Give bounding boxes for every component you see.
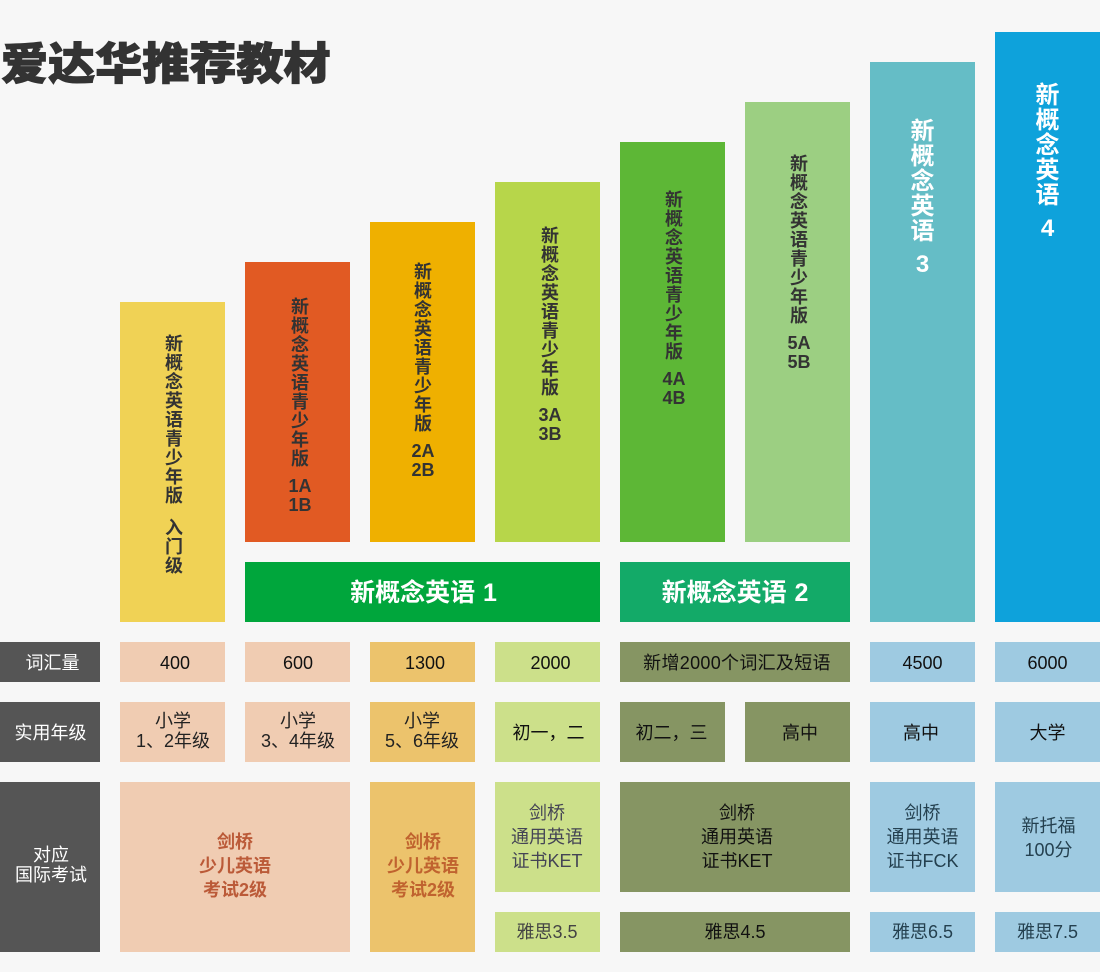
vocab 600: 600 xyxy=(283,653,313,673)
exam KET lime: 剑桥 xyxy=(529,803,565,823)
book bar: 入门级: 少 xyxy=(165,448,183,468)
book bar: 3A 3B: 3A xyxy=(538,405,562,425)
book bar: 2A 2B: 新 xyxy=(414,262,432,282)
exam KET olive xyxy=(620,782,850,892)
band: 新概念英语 2: 新概念英语 2 xyxy=(662,579,808,607)
book bar: 新概念英语 4: 念 xyxy=(1036,132,1060,159)
vocab 6000: 6000 xyxy=(1027,653,1068,673)
book bar: 4A 4B: 4A xyxy=(662,369,686,389)
exam 剑桥少儿英语: 少儿英语 xyxy=(387,856,459,876)
exam 剑桥少儿英语 wide: 剑桥 xyxy=(217,832,253,852)
book bar: 1A 1B: 概 xyxy=(291,316,309,336)
row label: 对应国际考试: 对应 xyxy=(33,845,69,865)
book bar: 入门级 xyxy=(120,302,225,622)
grade 高中: 高中 xyxy=(903,723,939,743)
book bar: 入门级: 英 xyxy=(165,391,183,411)
book bar: 4A 4B: 青 xyxy=(665,285,683,305)
exam KET olive: 证书KET xyxy=(701,851,772,871)
book bar: 新概念英语 4: 语 xyxy=(1036,182,1060,209)
book bar: 2A 2B: 语 xyxy=(414,338,432,358)
exam FCK xyxy=(870,782,975,892)
book bar: 新概念英语 3: 3 xyxy=(916,251,929,278)
book bar: 4A 4B: 语 xyxy=(665,266,683,286)
book bar: 4A 4B: 少 xyxy=(665,304,683,324)
exam KET lime: 证书KET xyxy=(511,851,582,871)
book bar: 入门级: 概 xyxy=(165,353,183,373)
grade 高中 xyxy=(870,702,975,762)
book bar: 4A 4B: 念 xyxy=(665,228,683,248)
grade 3、4: 小学 xyxy=(280,711,316,731)
book bar: 4A 4B: 英 xyxy=(665,247,683,267)
book bar: 入门级: 门 xyxy=(165,537,183,557)
band: 新概念英语 1 xyxy=(245,562,600,622)
book bar: 4A 4B: 版 xyxy=(665,342,683,362)
row label: 对应国际考试 xyxy=(0,782,100,952)
book bar: 新概念英语 3: 新 xyxy=(910,118,934,145)
exam IELTS 3.5: 雅思3.5 xyxy=(516,922,578,942)
grade 3、4 xyxy=(245,702,350,762)
exam 剑桥少儿英语 xyxy=(370,782,475,952)
book bar: 1A 1B: 版 xyxy=(291,449,309,469)
book bar: 新概念英语 4: 新 xyxy=(1036,82,1060,109)
vocab 6000 xyxy=(995,642,1100,682)
book bar: 1A 1B xyxy=(245,262,350,542)
book bar: 新概念英语 3: 念 xyxy=(910,168,934,195)
book bar: 2A 2B: 2A xyxy=(411,441,434,461)
book bar: 5A 5B: 少 xyxy=(790,268,808,288)
book bar: 新概念英语 4: 英 xyxy=(1036,157,1060,184)
grade 1、2: 1、2年级 xyxy=(136,731,210,751)
book bar: 2A 2B: 英 xyxy=(414,319,432,339)
grade 5、6: 5、6年级 xyxy=(385,731,459,751)
exam KET olive: 剑桥 xyxy=(719,803,755,823)
band: 新概念英语 1: 新概念英语 1 xyxy=(350,579,497,607)
vocab 1300: 1300 xyxy=(405,653,445,673)
grade 5、6 xyxy=(370,702,475,762)
grade 1、2 xyxy=(120,702,225,762)
vocab 2000: 2000 xyxy=(530,653,571,673)
book bar: 5A 5B: 年 xyxy=(790,287,808,307)
vocab 2000 xyxy=(495,642,600,682)
exam TOEFL: 新托福 xyxy=(1022,816,1076,836)
book bar: 2A 2B: 念 xyxy=(414,300,432,320)
book bar: 4A 4B xyxy=(620,142,725,542)
book bar: 1A 1B: 年 xyxy=(291,430,309,450)
book bar: 入门级: 版 xyxy=(165,486,183,506)
exam 剑桥少儿英语 wide xyxy=(120,782,350,952)
book bar: 入门级: 级 xyxy=(165,556,183,576)
exam 剑桥少儿英语 wide: 考试2级 xyxy=(203,880,267,900)
book bar: 5A 5B: 念 xyxy=(790,192,808,212)
book bar: 2A 2B: 版 xyxy=(414,414,432,434)
book bar: 3A 3B: 3B xyxy=(538,424,562,444)
book bar: 新概念英语 4: 4 xyxy=(1041,215,1054,242)
grade 1、2: 小学 xyxy=(155,711,191,731)
book bar: 1A 1B: 念 xyxy=(291,335,309,355)
grade 高中: 高中 xyxy=(782,723,818,743)
vocab 600 xyxy=(245,642,350,682)
book bar: 新概念英语 4: 概 xyxy=(1036,107,1060,134)
book bar: 5A 5B: 5A xyxy=(787,333,810,353)
grade 初二，三: 初二，三 xyxy=(636,723,708,743)
exam IELTS 7.5: 雅思7.5 xyxy=(1017,922,1078,942)
book bar: 3A 3B: 青 xyxy=(541,321,559,341)
exam FCK: 通用英语 xyxy=(886,827,958,847)
book bar: 5A 5B: 5B xyxy=(787,352,810,372)
book bar: 3A 3B: 少 xyxy=(541,340,559,360)
grade 大学: 大学 xyxy=(1030,723,1066,743)
book bar: 3A 3B: 语 xyxy=(541,302,559,322)
book bar: 3A 3B: 英 xyxy=(541,283,559,303)
book bar: 入门级: 入 xyxy=(165,518,183,538)
book bar: 3A 3B: 念 xyxy=(541,264,559,284)
grade 初二，三 xyxy=(620,702,725,762)
row label: 词汇量 xyxy=(0,642,100,682)
book bar: 2A 2B: 2B xyxy=(411,460,434,480)
book bar: 1A 1B: 青 xyxy=(291,392,309,412)
book bar: 3A 3B: 概 xyxy=(541,245,559,265)
exam 剑桥少儿英语 wide: 少儿英语 xyxy=(199,856,271,876)
book bar: 3A 3B: 年 xyxy=(541,359,559,379)
row label: 对应国际考试: 国际考试 xyxy=(15,865,87,885)
book bar: 2A 2B: 青 xyxy=(414,357,432,377)
book bar: 2A 2B: 概 xyxy=(414,281,432,301)
grade 3、4: 3、4年级 xyxy=(261,731,335,751)
vocab 4500 xyxy=(870,642,975,682)
book bar: 2A 2B: 年 xyxy=(414,395,432,415)
row label: 词汇量: 词汇量 xyxy=(26,653,80,673)
exam 剑桥少儿英语: 考试2级 xyxy=(391,880,455,900)
band: 新概念英语 2 xyxy=(620,562,850,622)
book bar: 4A 4B: 4B xyxy=(662,388,686,408)
book bar: 新概念英语 3: 语 xyxy=(910,218,934,245)
exam IELTS 3.5 xyxy=(495,912,600,952)
grade 初一，二: 初一，二 xyxy=(512,723,584,743)
row label: 实用年级: 实用年级 xyxy=(14,723,86,743)
book bar: 5A 5B: 英 xyxy=(790,211,808,231)
book bar: 4A 4B: 概 xyxy=(665,209,683,229)
exam FCK: 证书FCK xyxy=(886,851,958,871)
book bar: 新概念英语 3: 概 xyxy=(910,143,934,170)
book bar: 4A 4B: 新 xyxy=(665,190,683,210)
exam KET lime: 通用英语 xyxy=(511,827,583,847)
book bar: 5A 5B: 新 xyxy=(790,154,808,174)
exam IELTS 6.5 xyxy=(870,912,975,952)
exam IELTS 4.5: 雅思4.5 xyxy=(704,922,766,942)
book bar: 新概念英语 3: 英 xyxy=(910,193,934,220)
vocab 新增: 新增2000个词汇及短语 xyxy=(643,653,831,673)
book bar: 1A 1B: 英 xyxy=(291,354,309,374)
book bar: 新概念英语 3 xyxy=(870,62,975,622)
vocab 4500: 4500 xyxy=(902,653,943,673)
grade 初一，二 xyxy=(495,702,600,762)
book bar: 入门级: 念 xyxy=(165,372,183,392)
book bar: 入门级: 语 xyxy=(165,410,183,430)
book bar: 1A 1B: 少 xyxy=(291,411,309,431)
exam IELTS 6.5: 雅思6.5 xyxy=(892,922,953,942)
book bar: 入门级: 年 xyxy=(165,467,183,487)
book bar: 1A 1B: 1A xyxy=(288,476,312,496)
book bar: 4A 4B: 年 xyxy=(665,323,683,343)
book bar: 5A 5B: 版 xyxy=(790,306,808,326)
book bar: 1A 1B: 1B xyxy=(288,495,312,515)
book bar: 5A 5B xyxy=(745,102,850,542)
book bar: 2A 2B: 少 xyxy=(414,376,432,396)
exam IELTS 7.5 xyxy=(995,912,1100,952)
exam KET olive: 通用英语 xyxy=(701,827,773,847)
book bar: 1A 1B: 语 xyxy=(291,373,309,393)
book bar: 5A 5B: 概 xyxy=(790,173,808,193)
exam 剑桥少儿英语: 剑桥 xyxy=(405,832,441,852)
vocab 400 xyxy=(120,642,225,682)
exam KET lime xyxy=(495,782,600,892)
grade 高中 xyxy=(745,702,850,762)
row label: 实用年级 xyxy=(0,702,100,762)
title: 爱达华推荐教材 xyxy=(1,40,331,89)
book bar: 3A 3B xyxy=(495,182,600,542)
book bar: 5A 5B: 语 xyxy=(790,230,808,250)
book bar: 3A 3B: 版 xyxy=(541,378,559,398)
book bar: 3A 3B: 新 xyxy=(541,226,559,246)
book bar: 2A 2B xyxy=(370,222,475,542)
vocab 新增 xyxy=(620,642,850,682)
vocab 1300 xyxy=(370,642,475,682)
grade 大学 xyxy=(995,702,1100,762)
book bar: 入门级: 新 xyxy=(165,334,183,354)
exam TOEFL xyxy=(995,782,1100,892)
exam IELTS 4.5 xyxy=(620,912,850,952)
grade 5、6: 小学 xyxy=(404,711,440,731)
exam FCK: 剑桥 xyxy=(904,803,940,823)
exam TOEFL: 100分 xyxy=(1024,840,1073,860)
book bar: 新概念英语 4 xyxy=(995,32,1100,622)
book bar: 1A 1B: 新 xyxy=(291,297,309,317)
book bar: 5A 5B: 青 xyxy=(790,249,808,269)
book bar: 入门级: 青 xyxy=(165,429,183,449)
vocab 400: 400 xyxy=(160,653,190,673)
